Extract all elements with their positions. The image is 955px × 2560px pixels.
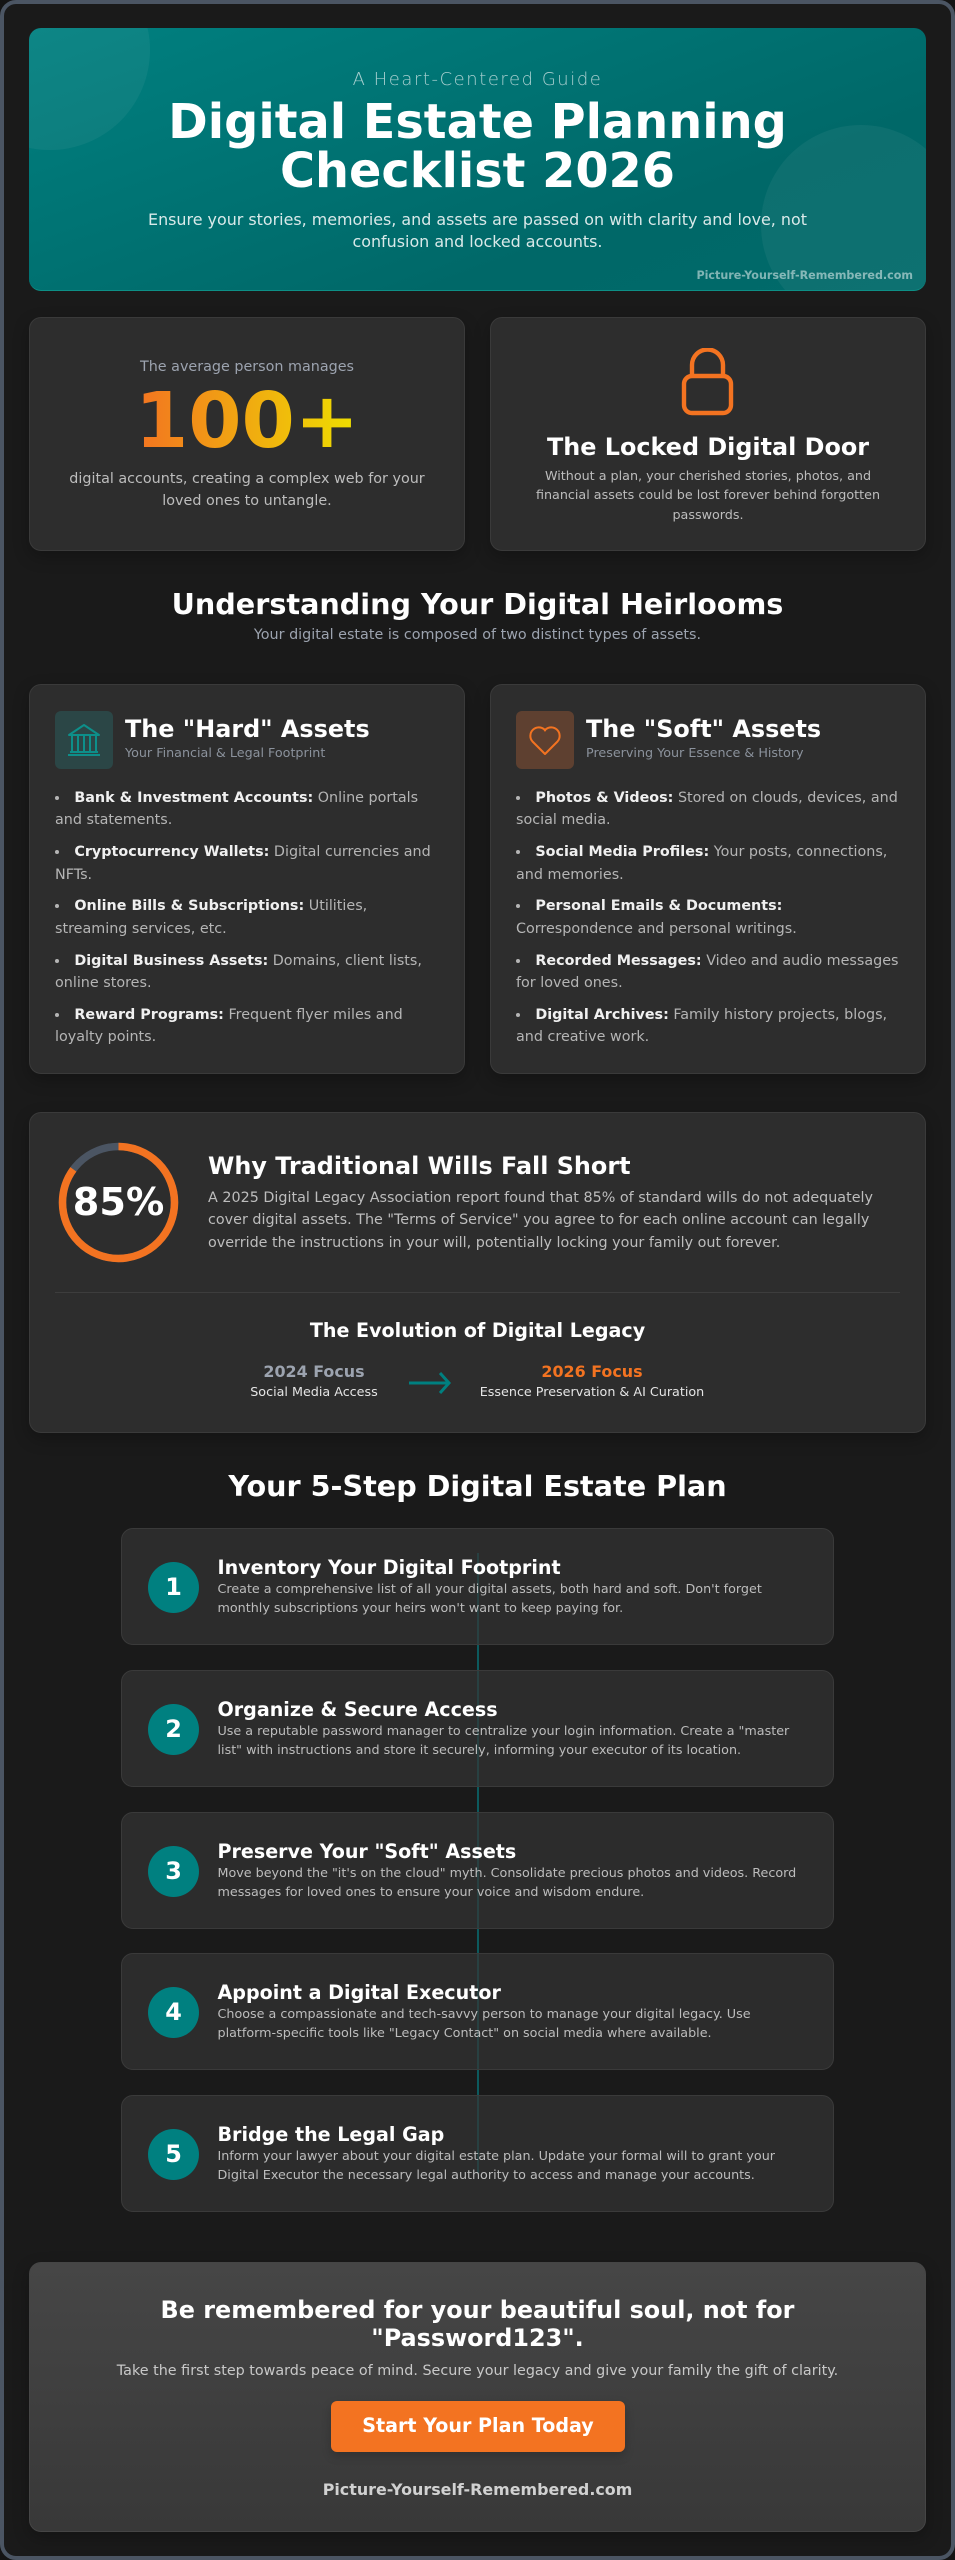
2026 value: Essence Preservation & AI Curation [480,1385,704,1400]
hero eyebrow: A Heart-Centered Guide [353,69,602,90]
step 5 number [148,2129,199,2180]
step 2 text [218,1724,790,1758]
step 3 text [218,1866,796,1900]
locked door text: passwords. [672,508,744,523]
step 3 text: Move beyond the "it's on the cloud" myth. Consolidate precious photos and videos. Record [218,1866,796,1881]
panel: call to action [29,2262,926,2532]
icon: padlock [682,348,734,416]
hero decorative circle: top left [0,0,150,150]
soft assets list [516,790,899,1045]
step 3 number: 3 [165,1857,182,1885]
panel: 100+ accounts stat [29,317,465,551]
step 5 text: Digital Executor the necessary legal authority to access and manage your accounts. [218,2168,755,2183]
step 2 [121,1670,834,1787]
2024 label: 2024 Focus [263,1362,365,1381]
hard assets list: NFTs. [55,867,92,883]
evolution: 2024 focus [250,1362,378,1400]
locked door text: financial assets could be lost forever behind forgotten [536,488,880,503]
stat description: digital accounts, creating a complex web for your [69,471,425,487]
locked door text: Without a plan, your cherished stories, photos, and [545,469,871,484]
hero subtitle: Ensure your stories, memories, and assets are passed on with clarity and love, not [148,210,807,229]
wills text: cover digital assets. The "Terms of Service" you agree to for each online account can legally [208,1212,869,1228]
step 3 text: messages for loved ones to ensure your voice and wisdom endure. [218,1885,644,1900]
step 5 number: 5 [165,2140,182,2168]
step 1 [121,1528,834,1645]
icon: bank [55,711,113,769]
step 5 text: Inform your lawyer about your digital estate plan. Update your formal will to grant your [218,2149,775,2164]
CTA button [331,2401,625,2452]
step 1 title: Inventory Your Digital Footprint [218,1556,561,1579]
step 3 [121,1812,834,1929]
CTA heading: Be remembered for your beautiful soul, not for [161,2296,794,2324]
panel: locked digital door [490,317,926,551]
step 3 number [148,1846,199,1897]
chart: 85 percent ring [58,1142,178,1262]
hard assets title: The "Hard" Assets [125,715,370,743]
stat lead-in: The average person manages [140,359,354,375]
step 4 text: Choose a compassionate and tech-savvy person to manage your digital legacy. Use [218,2007,751,2022]
CTA heading: "Password123". [371,2324,584,2352]
soft assets list: Photos & Videos: Stored on clouds, devices, and [535,790,898,806]
hard assets list: Cryptocurrency Wallets: Digital currencies and [74,844,431,860]
hero subtitle: confusion and locked accounts. [352,232,602,251]
icon: heart [516,711,574,769]
step 2 title: Organize & Secure Access [218,1698,498,1721]
2026 label: 2026 Focus [541,1362,643,1381]
soft assets list: Digital Archives: Family history projects, blogs, [535,1007,887,1023]
wills heading: Why Traditional Wills Fall Short [208,1152,631,1180]
panel: traditional wills and evolution [29,1112,926,1433]
evolution heading: The Evolution of Digital Legacy [310,1319,645,1342]
CTA website: Picture-Yourself-Remembered.com [323,2480,632,2499]
hero decorative circle: bottom right [761,125,955,325]
subheading: digital heirlooms: Your digital estate is composed of two distinct types of assets. [254,627,701,643]
hard assets list: online stores. [55,975,152,991]
CTA text: Take the first step towards peace of mind. Secure your legacy and give your family the gift of clarity. [117,2363,838,2379]
step 4 title: Appoint a Digital Executor [218,1981,501,2004]
soft assets list: Social Media Profiles: Your posts, connections, [535,844,887,860]
ring value: 85% [73,1181,164,1225]
stat description: loved ones to untangle. [162,493,332,509]
heading: digital heirlooms: Understanding Your Digital Heirlooms [172,587,783,621]
soft assets list: social media. [516,812,611,828]
hard assets list: Bank & Investment Accounts: Online portals [74,790,418,806]
soft assets list: for loved ones. [516,975,623,991]
title [168,95,787,199]
hard assets list: Online Bills & Subscriptions: Utilities, [74,898,367,914]
CTA heading [161,2296,794,2352]
locked door text [536,469,880,523]
step 1 text: monthly subscriptions your heirs won't want to keep paying for. [218,1601,623,1616]
soft assets list: Recorded Messages: Video and audio messages [535,953,899,969]
hard assets subtitle: Your Financial & Legal Footprint [125,746,325,761]
hard assets list [55,790,431,1045]
step 1 text: Create a comprehensive list of all your digital assets, both hard and soft. Don't forget [218,1582,762,1597]
step 2 number [148,1704,199,1755]
wills text: override the instructions in your will, potentially locking your family out forever. [208,1235,780,1251]
hard assets list: Reward Programs: Frequent flyer miles and [74,1007,403,1023]
heading: 5-step plan: Your 5-Step Digital Estate Plan [228,1469,727,1503]
stat number: 100+ [135,377,359,466]
hard assets list: streaming services, etc. [55,921,227,937]
step 5 text [218,2149,775,2183]
step 5 title: Bridge the Legal Gap [218,2123,444,2146]
soft assets list: and creative work. [516,1029,649,1045]
step 4 [121,1953,834,2070]
hard assets list: loyalty points. [55,1029,156,1045]
step 2 text: Use a reputable password manager to centralize your login information. Create a "master [218,1724,789,1739]
hero banner [29,28,926,291]
stat description [69,471,425,509]
step 4 number: 4 [165,1998,182,2026]
CTA button: Start Your Plan Today [362,2414,594,2437]
step 4 text: platform-specific tools like "Legacy Contact" on social media where available. [218,2026,712,2041]
step 4 number [148,1987,199,2038]
soft assets list: Personal Emails & Documents: [535,898,782,914]
hero credit: Picture-Yourself-Remembered.com [696,269,913,282]
step 1 number: 1 [165,1573,182,1601]
locked door heading: The Locked Digital Door [547,433,869,461]
title: Checklist 2026 [280,144,675,199]
step 1 text [218,1582,762,1616]
wills text: A 2025 Digital Legacy Association report found that 85% of standard wills do not adequately [208,1190,873,1206]
soft assets list: Correspondence and personal writings. [516,921,797,937]
step 1 number [148,1562,199,1613]
step 3 title: Preserve Your "Soft" Assets [218,1840,516,1863]
step 2 text: list" with instructions and store it securely, informing your executor of its location. [218,1743,741,1758]
hard assets list: Digital Business Assets: Domains, client lists, [74,953,422,969]
panel: soft assets [490,684,926,1074]
title: Digital Estate Planning [168,95,787,150]
evolution: 2026 focus [480,1362,704,1400]
step 2 number: 2 [165,1715,182,1743]
step 4 text [218,2007,751,2041]
soft assets list: and memories. [516,867,624,883]
panel: hard assets [29,684,465,1074]
wills text [208,1190,873,1251]
step 5 [121,2095,834,2212]
soft assets title: The "Soft" Assets [586,715,821,743]
arrow: evolution [409,1372,451,1394]
hero subtitle [148,210,807,251]
hard assets list: and statements. [55,812,172,828]
soft assets subtitle: Preserving Your Essence & History [586,746,804,761]
2024 value: Social Media Access [250,1385,378,1400]
